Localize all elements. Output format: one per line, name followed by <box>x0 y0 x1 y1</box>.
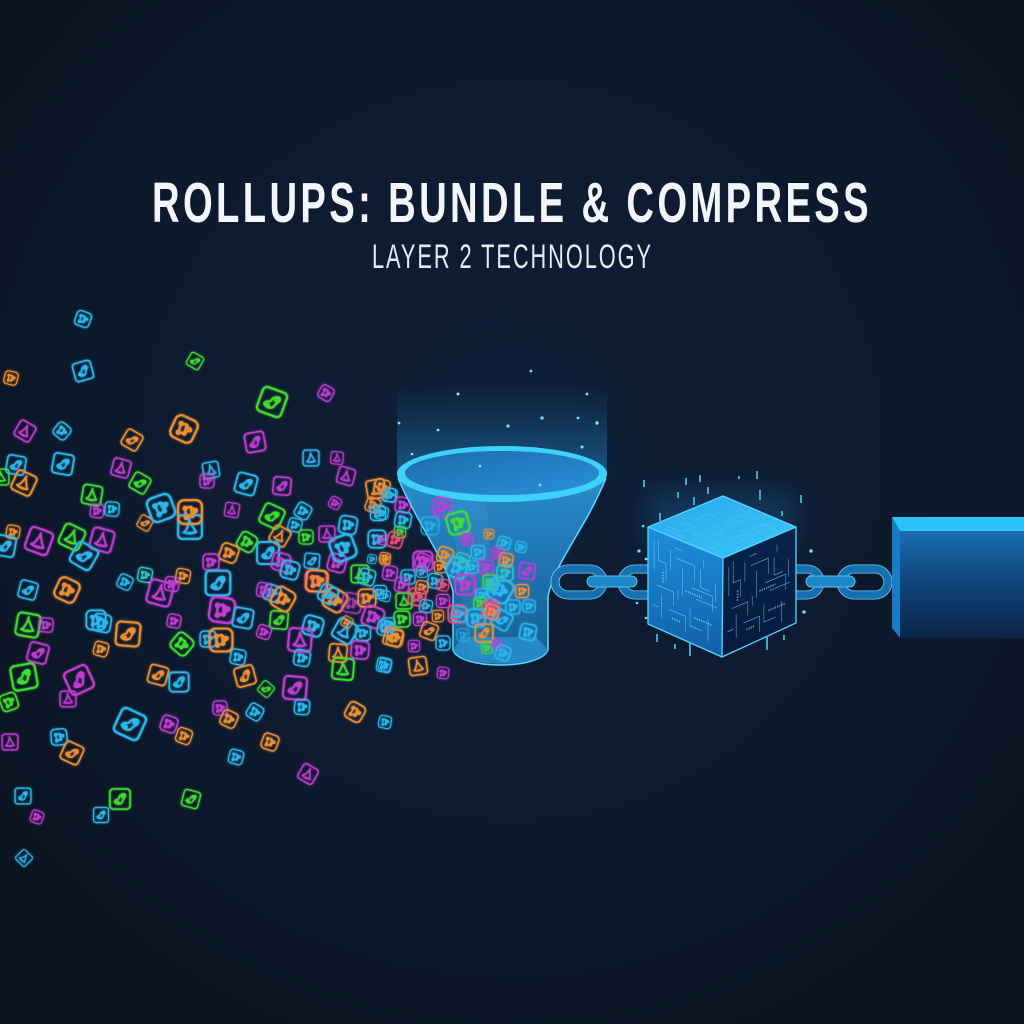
particles above funnel <box>398 370 599 455</box>
link 4 <box>841 569 888 595</box>
funnel inner ellipse <box>405 451 599 495</box>
cube top face <box>648 496 796 558</box>
block left bevel <box>892 517 900 638</box>
link 3 <box>775 569 820 595</box>
cube edges <box>648 496 796 657</box>
rim particle <box>539 484 541 486</box>
cube right face <box>722 527 796 657</box>
link 1 <box>555 569 603 595</box>
funnel <box>378 446 607 679</box>
light beam above funnel <box>397 385 607 475</box>
funnel refraction band <box>448 480 496 660</box>
funnel glass body <box>398 478 606 665</box>
block front <box>900 531 1024 638</box>
scattered transaction icons <box>0 309 412 867</box>
connecting bar <box>806 576 855 587</box>
chain left of cube <box>555 569 672 595</box>
rim highlight <box>479 465 481 467</box>
funnel rim <box>397 446 607 502</box>
blockchain block <box>892 517 1024 638</box>
connecting bar <box>587 576 637 587</box>
cube left face <box>648 527 723 657</box>
data particles around cube <box>644 471 801 656</box>
block top face <box>892 517 1024 531</box>
chain right of cube <box>775 569 888 595</box>
subtitle: LAYER 2 TECHNOLOGY <box>372 238 653 276</box>
cube glow <box>648 490 796 550</box>
icons inside funnel <box>378 496 537 679</box>
blockchain cube <box>648 496 796 657</box>
funnel inner bottom <box>453 637 548 664</box>
link 2 <box>622 569 672 595</box>
